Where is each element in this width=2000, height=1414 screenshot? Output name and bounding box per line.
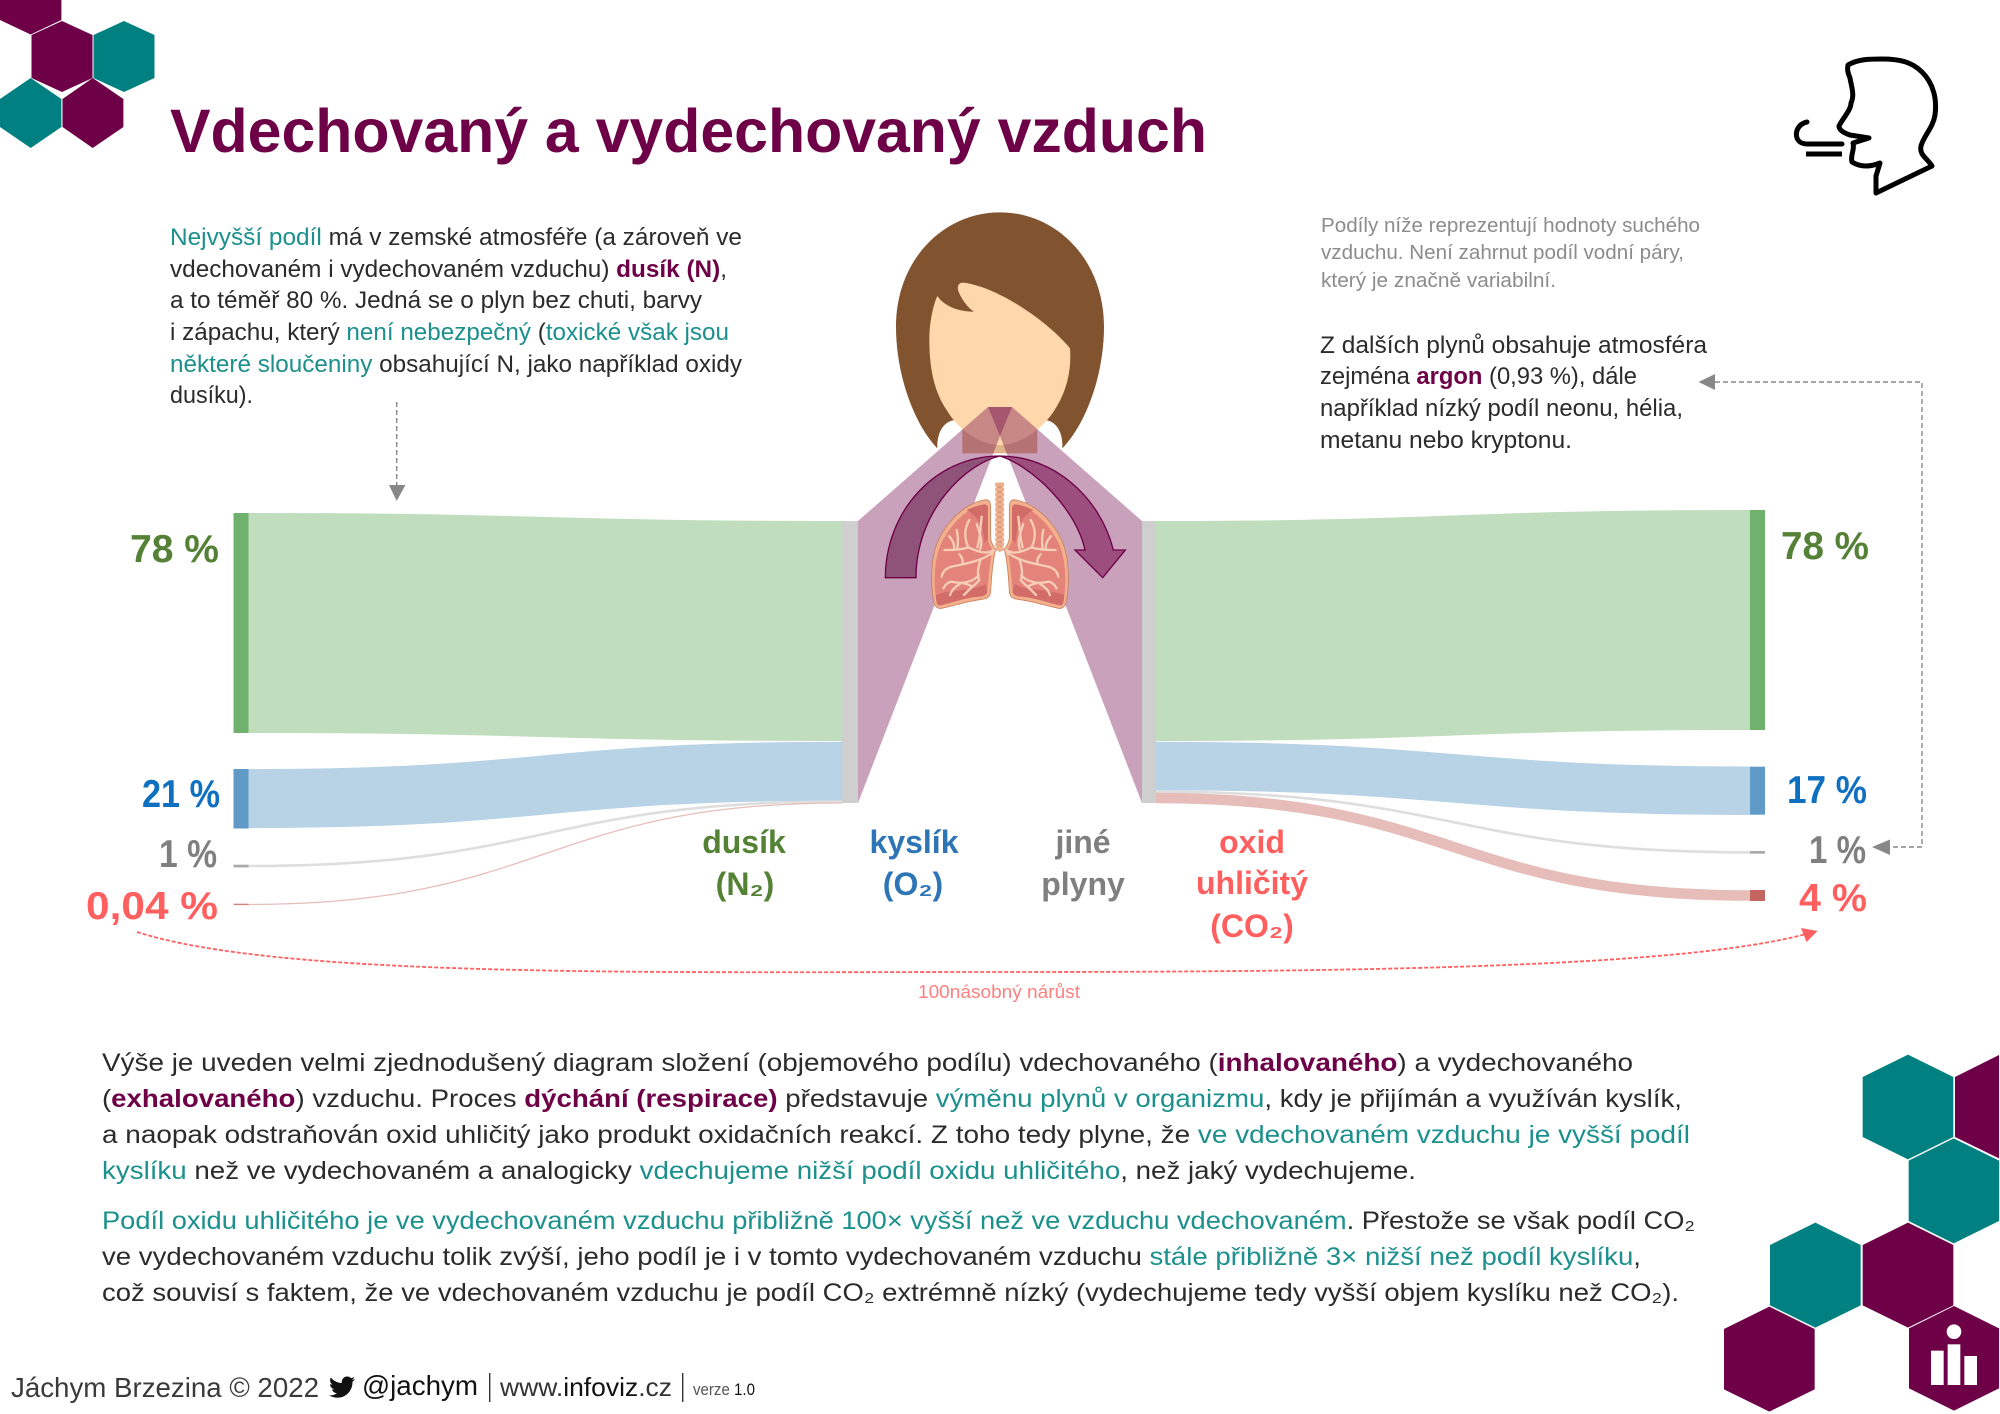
arrow: breathing cycle <box>885 456 1125 578</box>
icon: twitter bird <box>329 1376 355 1398</box>
exhaled percentages: 78 % <box>1781 525 1869 568</box>
legend: oxygen: (O₂) <box>883 866 943 902</box>
inhaled percentages: 0,04 % <box>86 885 218 928</box>
paragraph 2: Podíl oxidu uhličitého je ve vydechovaném vzduchu přibližně 100× vyšší než ve vzduchu vdechovaném . Přestože se však podíl CO₂ <box>102 1207 1695 1235</box>
sankey: exhaled air flows <box>1156 620 1750 896</box>
paragraph 1: (exhalovaného ) vzduchu. Proces dýchání (respirace) představuje výměnu plynů v organizmu , kdy je přijímán a využíván kyslík, <box>102 1085 1682 1113</box>
text block: argon <box>1320 332 1708 454</box>
inhaled percentages: 1 % <box>159 833 217 876</box>
paragraph 1 <box>102 1049 1690 1185</box>
footer: @jachym <box>362 1370 478 1401</box>
footer: www.infoviz.cz <box>499 1372 672 1402</box>
icon: person exhaling <box>1796 59 1936 193</box>
text block: nitrogen: některé sloučeniny obsahující N, jako například oxidy <box>170 351 742 378</box>
legend: oxygen: kyslík <box>870 824 959 860</box>
text block: nitrogen: dusíku). <box>170 382 253 409</box>
text block: argon: metanu nebo kryptonu. <box>1320 427 1572 454</box>
sankey: central grey nodes <box>842 521 1156 803</box>
exhaled percentages <box>1781 525 1869 920</box>
sankey: inhaled air flows <box>248 623 842 904</box>
legend: carbon dioxide: uhličitý <box>1196 865 1308 901</box>
airways: translucent purple bands <box>858 407 1142 803</box>
icon: lungs <box>932 483 1068 608</box>
arrow: nitrogen note to flow <box>389 402 406 501</box>
note: dry air values: Podíly níže reprezentují hodnoty suchého <box>1321 214 1700 237</box>
title: Vdechovaný a vydechovaný vzduch <box>170 97 1207 165</box>
text block: nitrogen <box>170 224 742 409</box>
note: dry air values: který je značně variabilní. <box>1321 269 1556 292</box>
legend: nitrogen: dusík <box>702 824 786 860</box>
legend: nitrogen <box>702 824 786 902</box>
text block: argon: například nízký podíl neonu, hélia, <box>1320 395 1683 422</box>
text block: argon: Z dalších plynů obsahuje atmosféra <box>1320 332 1708 359</box>
exhaled percentages: 17 % <box>1787 769 1867 812</box>
sankey: inhaled bars <box>234 513 248 905</box>
legend: other gases: jiné <box>1054 824 1111 860</box>
decorative hexagons bottom right <box>1724 1055 1999 1412</box>
arrow: hundredfold increase <box>137 928 1818 972</box>
paragraph 1: Výše je uveden velmi zjednodušený diagram složení (objemového podílu) vdechovaného ( inhalovaného ) a vydechovaného <box>102 1049 1633 1077</box>
legend: other gases: plyny <box>1041 866 1125 902</box>
caption: hundredfold increase: 100násobný nárůst <box>918 982 1080 1002</box>
legend: nitrogen: (N₂) <box>716 866 774 902</box>
arrow: other gases to argon note <box>1698 374 1922 855</box>
footer: verze 1.0 <box>693 1380 755 1399</box>
figure: head <box>896 212 1104 453</box>
face <box>929 283 1070 445</box>
text block: argon: zejména argon (0,93 %), dále <box>1320 363 1637 390</box>
logo hexagon with bars <box>1909 1306 1999 1411</box>
text block: nitrogen: a to téměř 80 %. Jedná se o plyn bez chuti, barvy <box>170 287 702 314</box>
legend: carbon dioxide <box>1196 824 1308 944</box>
inhaled percentages: 78 % <box>130 528 219 571</box>
legend: carbon dioxide: oxid <box>1219 824 1285 860</box>
sankey: exhaled bars <box>1750 510 1765 901</box>
inhaled percentages: 21 % <box>142 773 220 816</box>
legend: carbon dioxide: (CO₂) <box>1210 908 1294 944</box>
text block: nitrogen: Nejvyšší podíl má v zemské atmosféře (a zároveň ve <box>170 224 742 251</box>
inhaled percentages <box>86 528 220 928</box>
paragraph 1: a naopak odstraňován oxid uhličitý jako produkt oxidačních reakcí. Z toho tedy plyne, že ve vdechovaném vzduchu je vyšší podíl <box>102 1121 1690 1149</box>
footer <box>11 1370 755 1403</box>
note: dry air values <box>1321 214 1700 292</box>
paragraph 2: což souvisí s faktem, že ve vdechovaném vzduchu je podíl CO₂ extrémně nízký (vydechujeme tedy vyšší objem kyslíku než CO₂). <box>102 1279 1679 1307</box>
paragraph 1: kyslíku než ve vydechovaném a analogicky vdechujeme nižší podíl oxidu uhličitého , než jaký vydechujeme. <box>102 1157 1416 1185</box>
legend: other gases <box>1041 824 1125 902</box>
note: dry air values: vzduchu. Není zahrnut podíl vodní páry, <box>1321 241 1684 264</box>
hair <box>896 212 1104 448</box>
decorative hexagons top left <box>0 0 154 148</box>
text block: nitrogen: i zápachu, který není nebezpečný (toxické však jsou <box>170 319 729 346</box>
paragraph 2 <box>102 1207 1695 1307</box>
footer: Jáchym Brzezina © 2022 <box>11 1372 319 1403</box>
exhaled percentages: 1 % <box>1809 829 1866 872</box>
text block: nitrogen: vdechovaném i vydechovaném vzduchu) dusík (N), <box>170 256 727 283</box>
exhaled percentages: 4 % <box>1799 877 1867 920</box>
paragraph 2: ve vydechovaném vzduchu tolik zvýší, jeho podíl je i v tomto vydechovaném vzduchu stále přibližně 3× nižší než podíl kyslíku , <box>102 1243 1641 1271</box>
legend: oxygen <box>870 824 959 902</box>
